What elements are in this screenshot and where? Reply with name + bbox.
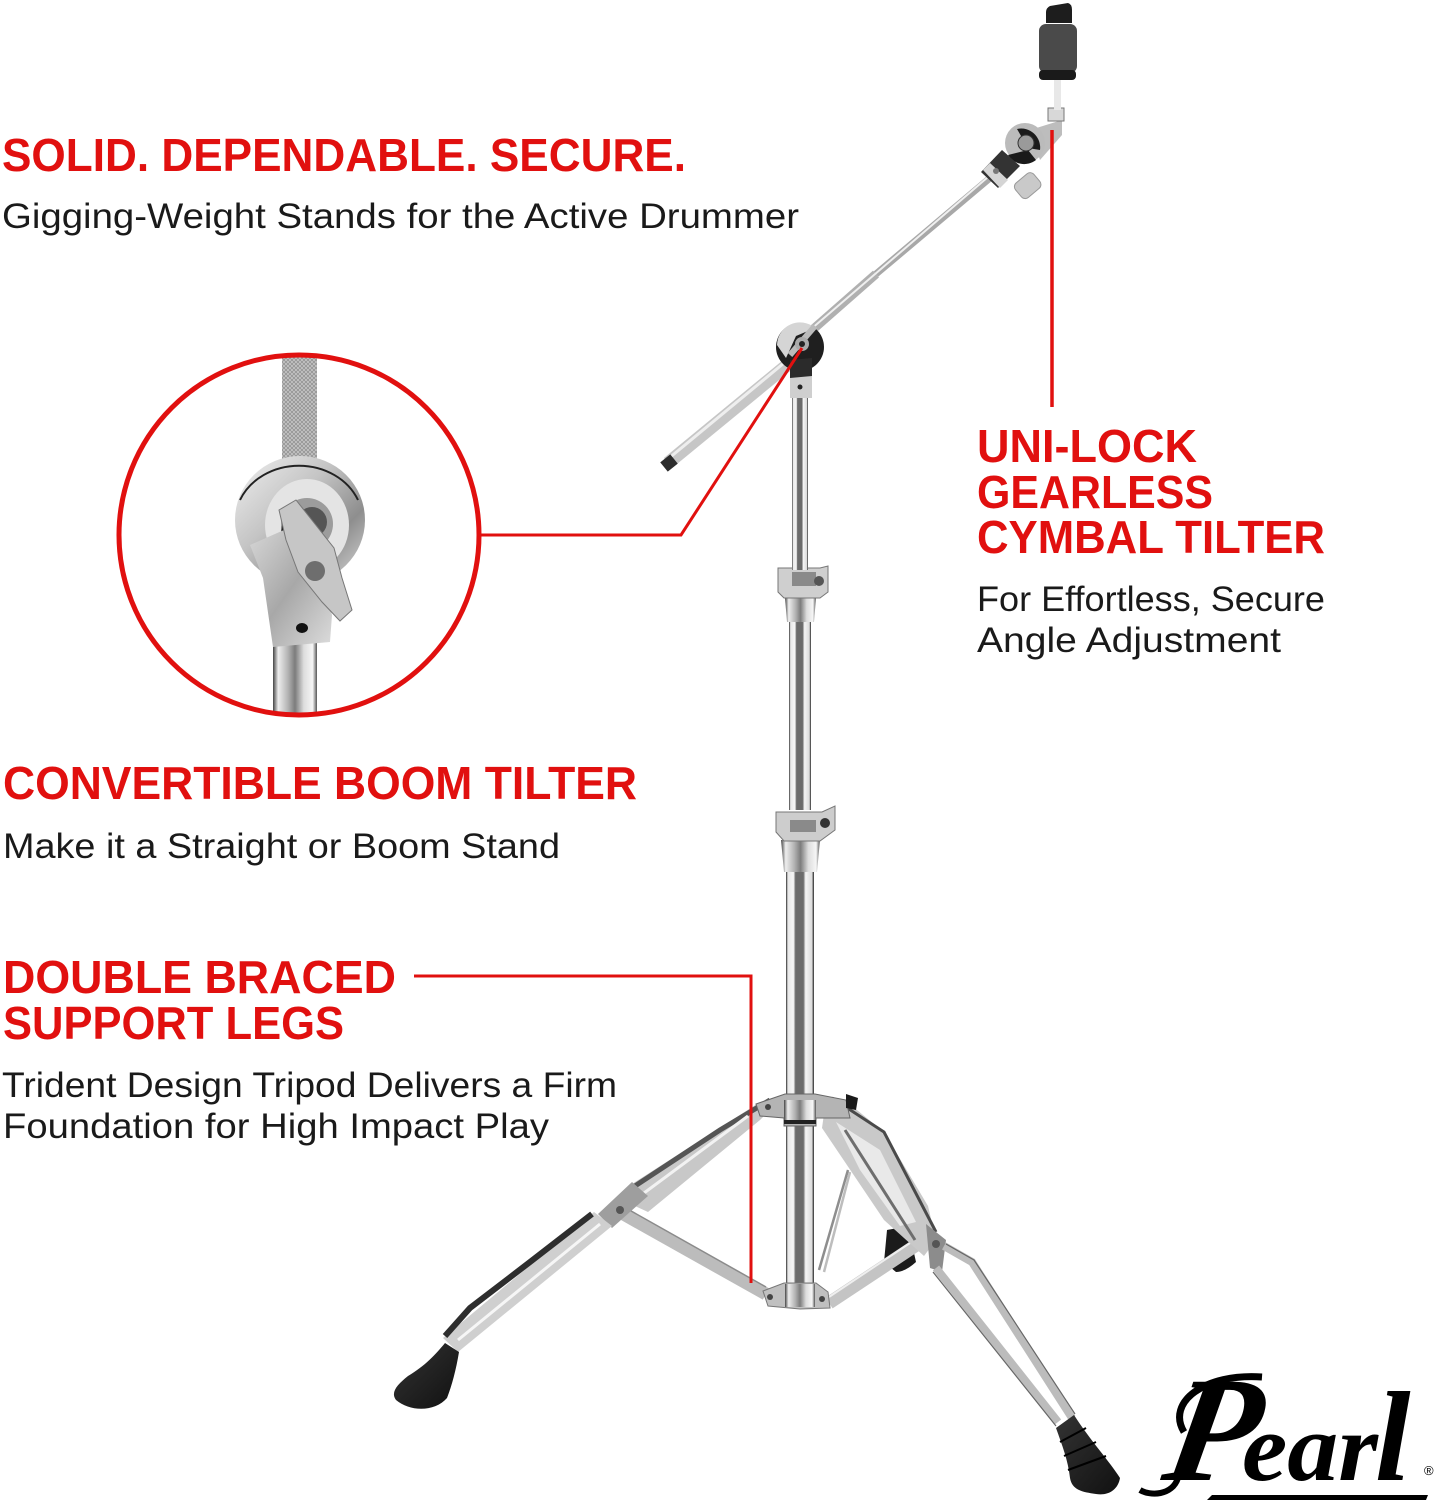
lower tube	[273, 640, 317, 716]
text: double braced description: Trident Design Tripod Delivers a Firm	[2, 1066, 617, 1105]
text: uni-lock description	[977, 580, 1325, 660]
right foot	[1056, 1415, 1120, 1494]
rear boom counter-arm	[664, 363, 786, 467]
cymbal tilter	[981, 108, 1064, 201]
heading: convertible boom tilter: CONVERTIBLE BOOM TILTER	[3, 757, 637, 809]
bracket hole	[296, 623, 308, 633]
right leg	[822, 1098, 1075, 1426]
logo: Pearl	[1140, 1346, 1434, 1500]
upper mast tube	[792, 396, 808, 570]
left leg	[443, 1100, 770, 1352]
text: double braced description	[2, 1066, 617, 1146]
knurled rod	[282, 355, 317, 459]
callout: cymbal tilter pointer line	[1050, 130, 1054, 407]
heading: double braced support legs	[3, 951, 396, 1049]
heading: solid dependable secure: SOLID. DEPENDABLE. SECURE.	[2, 129, 686, 181]
locking lever	[279, 500, 352, 621]
left foot	[394, 1343, 459, 1409]
zoom circle: boom tilter close-up	[119, 355, 479, 716]
lower tripod collar	[763, 1283, 830, 1309]
middle mast tube	[789, 620, 811, 810]
red ring	[119, 355, 479, 715]
heading: uni-lock gearless cymbal tilter	[977, 420, 1325, 563]
logo: Pearl: ®	[1424, 1463, 1434, 1478]
subheading: gigging-weight stands: Gigging-Weight Stands for the Active Drummer	[2, 197, 799, 236]
lever hole	[305, 561, 325, 581]
text: convertible description: Make it a Straight or Boom Stand	[3, 827, 560, 866]
text: double braced description: Foundation for High Impact Play	[3, 1107, 550, 1146]
callout: support legs pointer line	[414, 976, 751, 1283]
heading: uni-lock gearless cymbal tilter: UNI-LOCK	[977, 420, 1197, 472]
upper clamp and cone	[778, 566, 828, 622]
wing nut stem	[1054, 80, 1061, 110]
felt and top nut	[1039, 3, 1077, 80]
lower mast tube	[786, 868, 814, 1300]
bracket block	[250, 530, 332, 647]
heading: uni-lock gearless cymbal tilter: CYMBAL TILTER	[977, 511, 1325, 563]
chrome disc	[235, 456, 365, 584]
heading: double braced support legs: SUPPORT LEGS	[3, 997, 344, 1049]
rear leg and brace	[819, 1170, 936, 1303]
logo: Pearl: ear	[1242, 1394, 1380, 1500]
boom tilter knuckle	[776, 322, 824, 398]
text: uni-lock description: For Effortless, Secure	[977, 580, 1325, 619]
text: uni-lock description: Angle Adjustment	[977, 621, 1281, 660]
left brace	[620, 1207, 766, 1294]
heading: uni-lock gearless cymbal tilter: GEARLESS	[977, 466, 1213, 518]
lower clamp and cone	[776, 806, 835, 872]
cymbal stand illustration	[394, 3, 1120, 1494]
boom arm	[810, 177, 990, 332]
upper tripod spider	[756, 1094, 858, 1126]
heading: double braced support legs: DOUBLE BRACED	[3, 951, 396, 1003]
callout: boom tilter pointer line	[481, 348, 802, 535]
